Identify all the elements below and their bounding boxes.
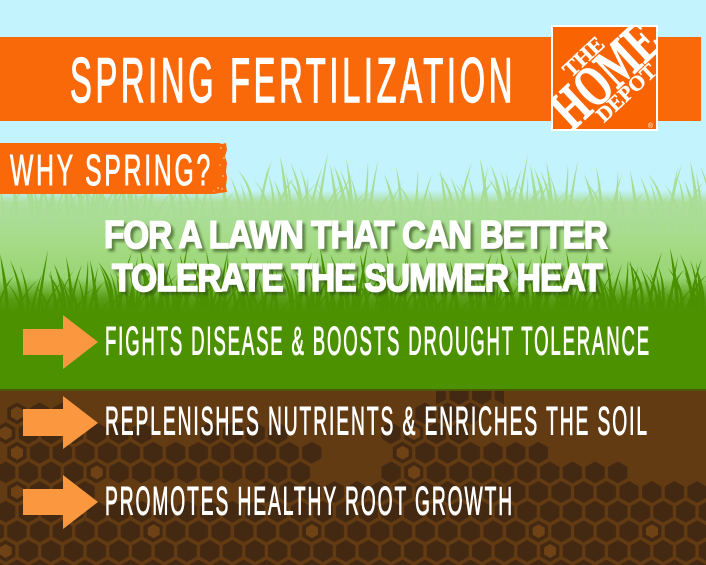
Home Depot logo: DEPOT xyxy=(591,59,661,127)
arrow 1 xyxy=(23,315,98,369)
arrow 3 xyxy=(23,475,98,529)
title banner xyxy=(0,37,701,121)
Home Depot logo: THE xyxy=(557,31,609,82)
heading: why spring: WHY SPRING? xyxy=(10,146,213,195)
soil band xyxy=(0,389,706,565)
light green grass field xyxy=(0,149,706,310)
Home Depot logo: ® xyxy=(648,122,654,130)
arrow 2 xyxy=(23,396,98,449)
headline: TOLERATE THE SUMMER HEAT xyxy=(112,257,603,300)
Why Spring banner xyxy=(0,143,227,195)
sky background xyxy=(0,0,706,300)
headline: FOR A LAWN THAT CAN BETTER xyxy=(104,214,608,257)
honeycomb pattern xyxy=(0,391,706,565)
headline xyxy=(104,214,608,300)
dark green grass xyxy=(0,244,706,390)
